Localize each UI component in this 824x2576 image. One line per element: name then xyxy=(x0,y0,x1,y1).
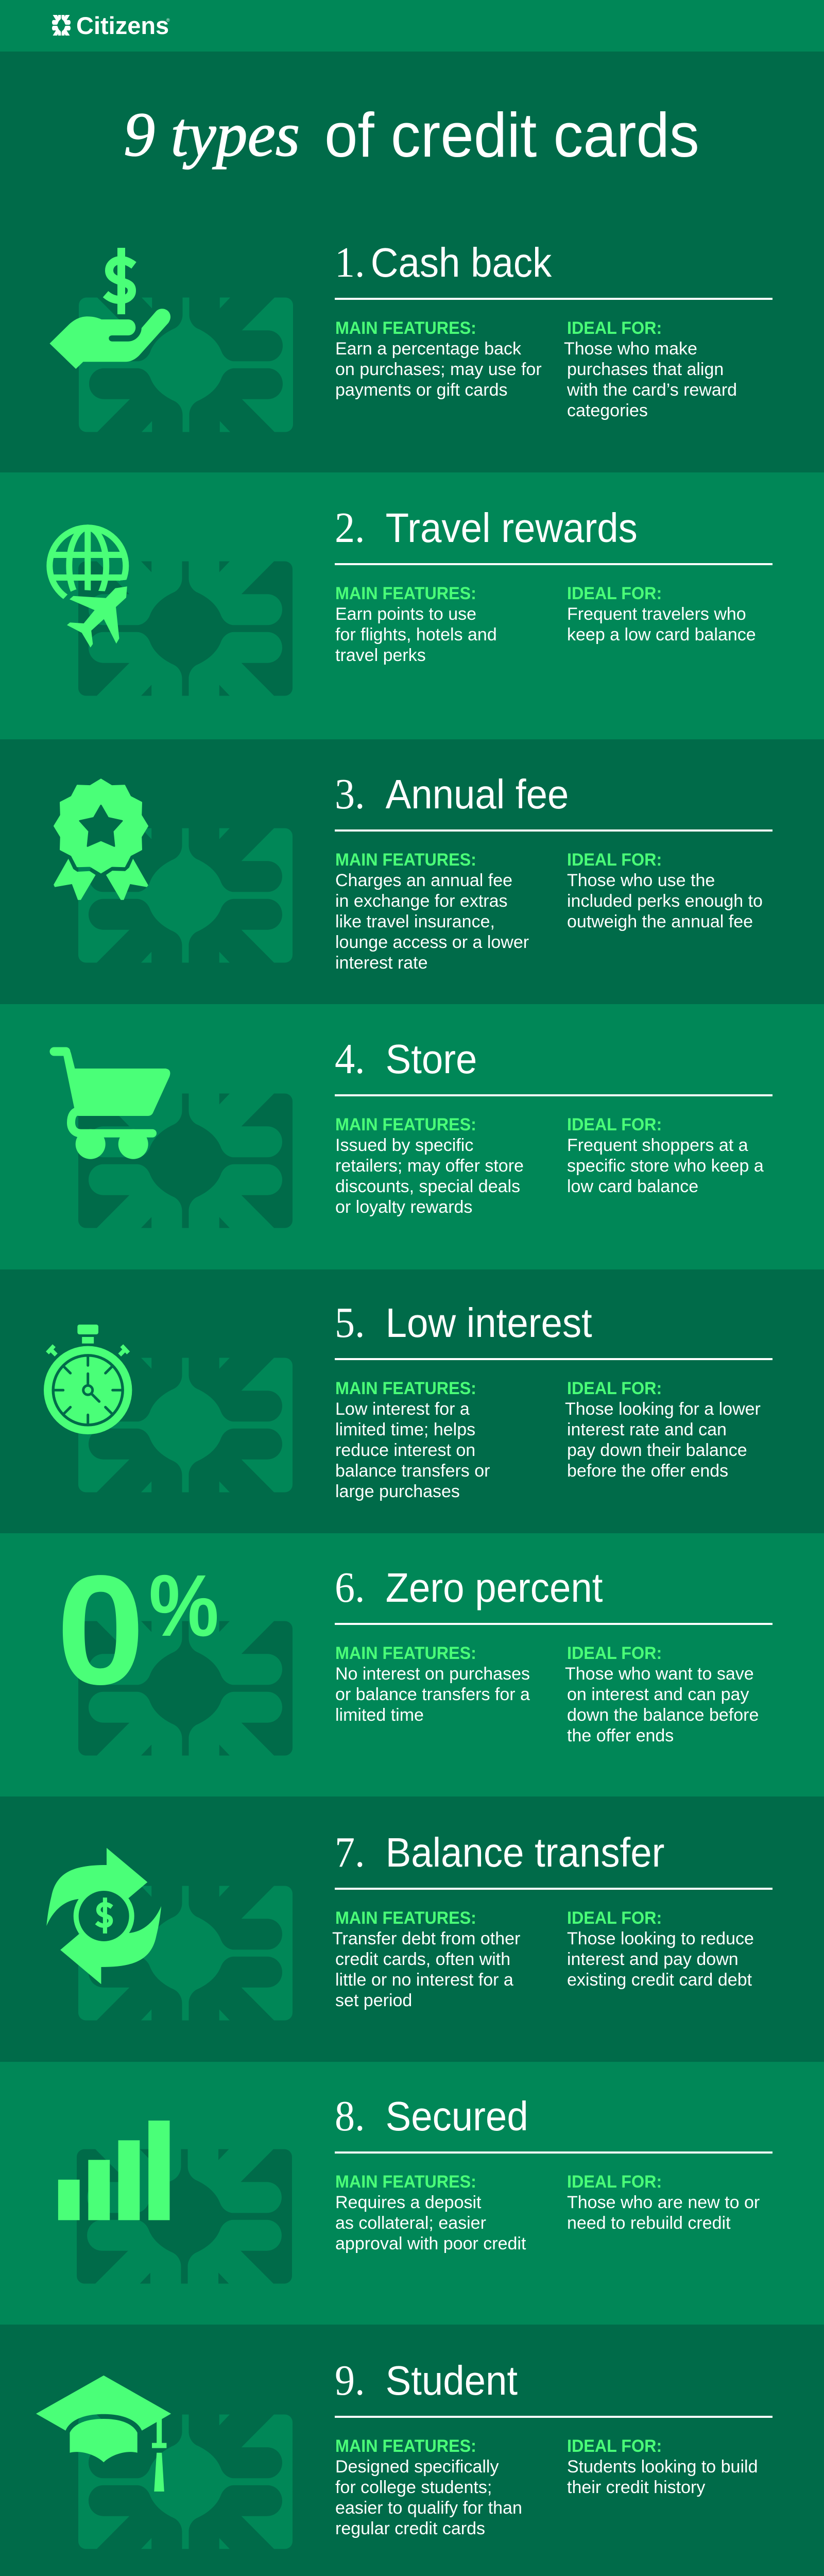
panel: travel rewards xyxy=(0,472,824,739)
divider rule xyxy=(335,2151,772,2154)
text: main features: discounts, special deals xyxy=(335,1177,520,1196)
divider rule xyxy=(335,563,772,565)
background emblem xyxy=(78,562,293,696)
text: main features: travel perks xyxy=(335,646,426,665)
text: ideal for: IDEAL FOR: xyxy=(567,2436,662,2456)
panel: annual fee xyxy=(0,739,824,1004)
divider rule xyxy=(335,829,772,832)
text: main features: retailers; may offer store xyxy=(335,1156,524,1176)
divider rule xyxy=(335,1888,772,1890)
text: ideal for xyxy=(567,2436,758,2498)
registered mark: ® xyxy=(166,18,170,23)
text: main features: for flights, hotels and xyxy=(335,625,497,645)
text: main features: MAIN FEATURES: xyxy=(335,850,476,870)
text: main features xyxy=(335,1908,520,2011)
heading: 4. Store: Store xyxy=(386,1036,477,1082)
text: ideal for: the offer ends xyxy=(567,1726,674,1745)
text: ideal for: IDEAL FOR: xyxy=(567,2172,662,2192)
heading: 5. Low interest: 5. xyxy=(335,1299,365,1347)
text: ideal for xyxy=(567,1908,754,1990)
divider rule xyxy=(335,298,772,300)
text: main features: MAIN FEATURES: xyxy=(335,1908,476,1928)
icon: shopping cart xyxy=(49,1047,170,1159)
heading: 2. Travel rewards: Travel rewards xyxy=(386,505,638,551)
background emblem xyxy=(78,1093,293,1228)
icon: stopwatch xyxy=(44,1325,132,1434)
heading: 4. Store xyxy=(335,1035,477,1083)
heading: 5. Low interest: Low interest xyxy=(386,1300,592,1346)
text: ideal for: interest and pay down xyxy=(567,1950,739,1969)
divider rule xyxy=(335,1094,772,1096)
icon: zero percent xyxy=(57,1569,219,1690)
logo: Citizens xyxy=(52,12,170,39)
text: ideal for: Frequent travelers who xyxy=(567,604,746,624)
text: main features xyxy=(335,1379,490,1501)
text: main features: MAIN FEATURES: xyxy=(335,2172,476,2192)
text: ideal for: their credit history xyxy=(567,2478,705,2497)
heading: 8. Secured: Secured xyxy=(386,2093,528,2139)
text: main features: Issued by specific xyxy=(335,1136,473,1155)
divider rule xyxy=(335,2416,772,2418)
title xyxy=(124,100,699,170)
heading: 8. Secured: 8. xyxy=(335,2092,365,2140)
background emblem xyxy=(76,2149,293,2284)
text: ideal for: Those looking for a lower xyxy=(565,1399,761,1419)
text: ideal for: IDEAL FOR: xyxy=(567,1908,662,1928)
text: main features: easier to qualify for than xyxy=(335,2498,522,2518)
heading: 7. Balance transfer: Balance transfer xyxy=(386,1829,664,1875)
text: main features: payments or gift cards xyxy=(335,380,507,400)
text: ideal for: specific store who keep a xyxy=(567,1156,764,1176)
text: main features: regular credit cards xyxy=(335,2519,485,2538)
heading: 1. Cash back: 1. xyxy=(335,239,365,286)
text: main features: little or no interest for a xyxy=(335,1970,513,1990)
text: main features xyxy=(335,850,529,973)
background emblem xyxy=(78,828,293,962)
text: ideal for: down the balance before xyxy=(567,1705,759,1725)
text: main features: Low interest for a xyxy=(335,1399,470,1419)
panel: secured xyxy=(0,2062,824,2325)
text: main features xyxy=(335,318,542,400)
text: ideal for: purchases that align xyxy=(567,360,724,379)
text: main features: Earn points to use xyxy=(335,604,476,624)
text: main features: Transfer debt from other xyxy=(332,1929,520,1948)
heading: 9. Student: 9. xyxy=(335,2357,365,2404)
text: main features: limited time; helps xyxy=(335,1420,475,1439)
text: ideal for: Those who make xyxy=(564,339,697,359)
title: 9 types xyxy=(124,100,300,170)
text: main features: Charges an annual fee xyxy=(335,871,512,890)
text: main features xyxy=(335,1115,524,1217)
text: main features: MAIN FEATURES: xyxy=(335,318,476,338)
text: main features: like travel insurance, xyxy=(335,912,495,931)
text: ideal for: IDEAL FOR: xyxy=(567,318,662,338)
heading: 7. Balance transfer: 7. xyxy=(335,1828,365,1876)
text: main features: on purchases; may use for xyxy=(335,360,542,379)
icon: hand holding dollar xyxy=(49,248,170,369)
text: main features: set period xyxy=(335,1991,412,2010)
heading: 9. Student: Student xyxy=(386,2358,518,2403)
heading: 3. Annual fee: Annual fee xyxy=(386,771,569,817)
background emblem xyxy=(78,1358,293,1492)
text: ideal for: on interest and can pay xyxy=(567,1685,749,1704)
icon: globe and plane xyxy=(46,524,129,648)
text: main features: MAIN FEATURES: xyxy=(335,2436,476,2456)
heading: 2. Travel rewards: 2. xyxy=(335,504,365,552)
text: main features: MAIN FEATURES: xyxy=(335,1379,476,1398)
text: main features: Earn a percentage back xyxy=(335,339,521,359)
panel: low interest xyxy=(0,1269,824,1533)
text: main features: MAIN FEATURES: xyxy=(335,584,476,603)
text: main features: Designed specifically xyxy=(335,2457,499,2477)
header bar xyxy=(0,0,824,52)
background emblem xyxy=(79,298,293,432)
text: ideal for: interest rate and can xyxy=(567,1420,727,1439)
text: main features: or loyalty rewards xyxy=(335,1197,472,1217)
panel: zero percent xyxy=(0,1533,824,1797)
text: main features xyxy=(335,2436,522,2539)
text: ideal for xyxy=(567,2172,760,2233)
text: ideal for xyxy=(567,584,756,645)
background emblem xyxy=(78,1621,293,1756)
text: ideal for: Those who want to save xyxy=(565,1664,754,1684)
text: ideal for: before the offer ends xyxy=(567,1461,728,1481)
text: main features xyxy=(335,1643,530,1725)
heading: 4. Store: 4. xyxy=(335,1035,365,1083)
text: main features: reduce interest on xyxy=(335,1440,475,1460)
divider rule xyxy=(335,1358,772,1360)
icon: Citizens emblem xyxy=(52,15,71,36)
text: main features: limited time xyxy=(335,1705,424,1725)
panel: store xyxy=(0,1004,824,1269)
text: ideal for: Those who use the xyxy=(567,871,715,890)
text: ideal for: IDEAL FOR: xyxy=(567,1643,662,1663)
text: ideal for: IDEAL FOR: xyxy=(567,584,662,603)
panel: student xyxy=(0,2325,824,2576)
text: main features: for college students; xyxy=(335,2478,492,2497)
text: ideal for: IDEAL FOR: xyxy=(567,1115,662,1134)
text: ideal for xyxy=(565,1379,761,1481)
text: main features xyxy=(335,2172,526,2254)
text: main features: or balance transfers for a xyxy=(335,1685,530,1704)
title: of credit cards xyxy=(324,100,699,170)
text: ideal for: Frequent shoppers at a xyxy=(567,1136,748,1155)
background emblem xyxy=(78,2414,293,2549)
text: ideal for xyxy=(567,850,763,931)
text: ideal for: with the card’s reward xyxy=(567,380,737,400)
text: ideal for xyxy=(567,1115,764,1196)
text: ideal for: pay down their balance xyxy=(567,1440,747,1460)
icon: award badge xyxy=(54,778,148,900)
text: ideal for: Those who are new to or xyxy=(567,2193,760,2212)
text: main features: in exchange for extras xyxy=(335,891,508,911)
text: ideal for: existing credit card debt xyxy=(567,1970,752,1990)
icon: circular arrows with dollar xyxy=(44,1845,164,1987)
text: ideal for: outweigh the annual fee xyxy=(567,912,753,931)
divider rule xyxy=(335,1623,772,1625)
logo wordmark: Citizens xyxy=(76,12,169,39)
heading: 3. Annual fee: 3. xyxy=(335,770,365,818)
text: main features: Requires a deposit xyxy=(335,2193,482,2212)
text: ideal for: need to rebuild credit xyxy=(567,2213,731,2233)
panel: balance transfer xyxy=(0,1797,824,2062)
text: main features: No interest on purchases xyxy=(335,1664,530,1684)
text: main features: MAIN FEATURES: xyxy=(335,1643,476,1663)
text: ideal for: Those looking to reduce xyxy=(567,1929,754,1948)
text: main features xyxy=(335,584,497,665)
heading: 1. Cash back: Cash back xyxy=(371,240,552,285)
text: main features: approval with poor credit xyxy=(335,2234,526,2253)
text: main features: lounge access or a lower xyxy=(335,933,529,952)
text: main features: as collateral; easier xyxy=(335,2213,486,2233)
icon: rising bar chart xyxy=(58,2121,170,2222)
icon: graduation cap xyxy=(35,2374,173,2499)
text: ideal for: included perks enough to xyxy=(567,891,763,911)
text: ideal for: categories xyxy=(567,401,648,420)
heading: 6. Zero percent: Zero percent xyxy=(386,1565,603,1611)
panel: title and cash back xyxy=(0,52,824,472)
background emblem xyxy=(78,1886,293,2021)
text: main features: credit cards, often with xyxy=(335,1950,510,1969)
text: ideal for: IDEAL FOR: xyxy=(567,1379,662,1398)
text: main features: balance transfers or xyxy=(335,1461,490,1481)
text: main features: large purchases xyxy=(335,1482,460,1501)
text: ideal for xyxy=(564,318,737,420)
text: ideal for: IDEAL FOR: xyxy=(567,850,662,870)
text: main features: MAIN FEATURES: xyxy=(335,1115,476,1134)
text: ideal for xyxy=(565,1643,759,1745)
text: main features: interest rate xyxy=(335,953,428,973)
text: ideal for: Students looking to build xyxy=(567,2457,758,2477)
heading: 6. Zero percent: 6. xyxy=(335,1564,365,1612)
text: ideal for: keep a low card balance xyxy=(567,625,756,645)
text: ideal for: low card balance xyxy=(567,1177,698,1196)
